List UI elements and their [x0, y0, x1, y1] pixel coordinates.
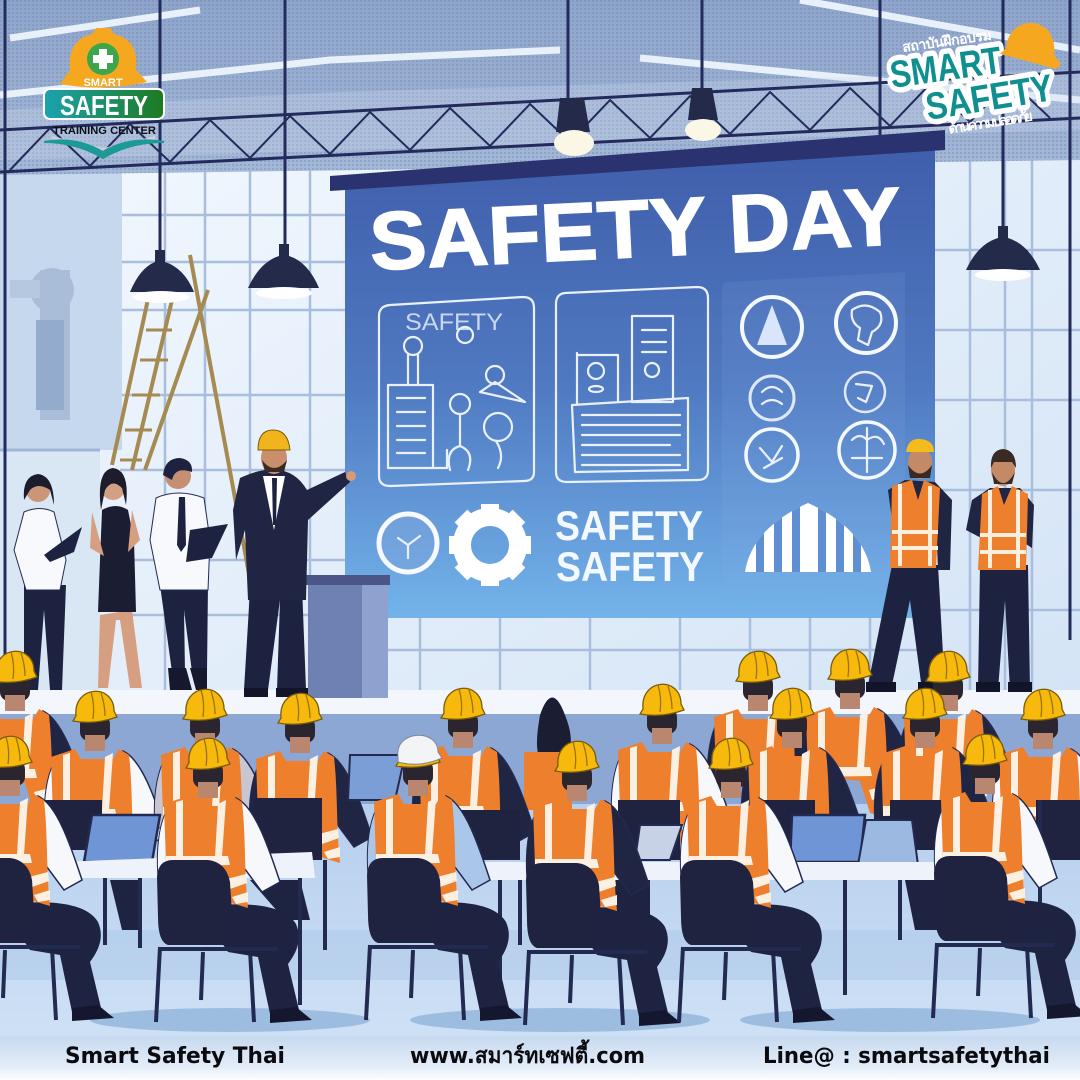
screen title: SAFETY DAY — [367, 171, 903, 288]
logo: smart safety institute: SMART — [887, 40, 1004, 97]
footer: website: www.สมาร์ทเซฟตี้.com — [410, 1039, 645, 1069]
ceiling — [0, 0, 1080, 175]
audience: front row — [0, 734, 1080, 1026]
logo: smart safety institute: SAFETY — [923, 67, 1056, 129]
presenter — [233, 430, 356, 697]
stage platform — [0, 690, 1080, 804]
panel: process chart sketch — [379, 297, 534, 486]
podium — [300, 575, 390, 698]
projection screen — [330, 130, 945, 618]
screen label: safety safety — [555, 502, 704, 590]
audience: back row — [0, 649, 1020, 821]
icon: striped helmet arch — [745, 503, 871, 572]
tables — [60, 800, 1040, 1005]
logo: smart safety training center: TRAINING CENTER — [53, 125, 156, 137]
icon: compass badge — [379, 514, 437, 572]
woman in black dress — [90, 468, 142, 688]
logo: smart safety institute — [887, 23, 1061, 137]
logo: smart safety institute: สถาบันฝึกอบรม — [901, 27, 993, 55]
audience: middle row — [44, 684, 1080, 930]
logo: smart safety institute: ด้านความปลอดภัย — [947, 107, 1034, 137]
screen label: safety safety: SAFETY — [556, 543, 704, 590]
logo: smart safety training center: SMART — [83, 77, 123, 89]
screen label: safety safety: SAFETY — [555, 502, 703, 549]
woman with clipboard — [14, 474, 82, 690]
left wall pipe — [10, 268, 74, 420]
logo: smart safety training center: SAFETY — [60, 90, 148, 121]
floor — [0, 804, 1080, 1044]
footer: brand name: Smart Safety Thai — [65, 1044, 285, 1069]
background wall and windows — [0, 0, 1080, 700]
standing safety officer 2 — [966, 449, 1034, 692]
laptops — [84, 755, 918, 865]
panel: icon group — [722, 272, 905, 596]
man with clipboard — [150, 458, 228, 690]
pendant lamps — [130, 88, 1040, 303]
panel: document sketch — [556, 287, 708, 482]
footer band — [0, 1036, 1080, 1080]
icon: gear — [449, 504, 531, 586]
footer: line id: Line@ : smartsafetythai — [763, 1044, 1050, 1069]
roof truss and hanging wires — [0, 0, 1080, 700]
logo: smart safety training center — [44, 28, 164, 158]
ladder — [112, 255, 252, 590]
standing safety officer 1 — [866, 439, 952, 692]
panel: process chart sketch: SAFETY — [405, 309, 503, 336]
